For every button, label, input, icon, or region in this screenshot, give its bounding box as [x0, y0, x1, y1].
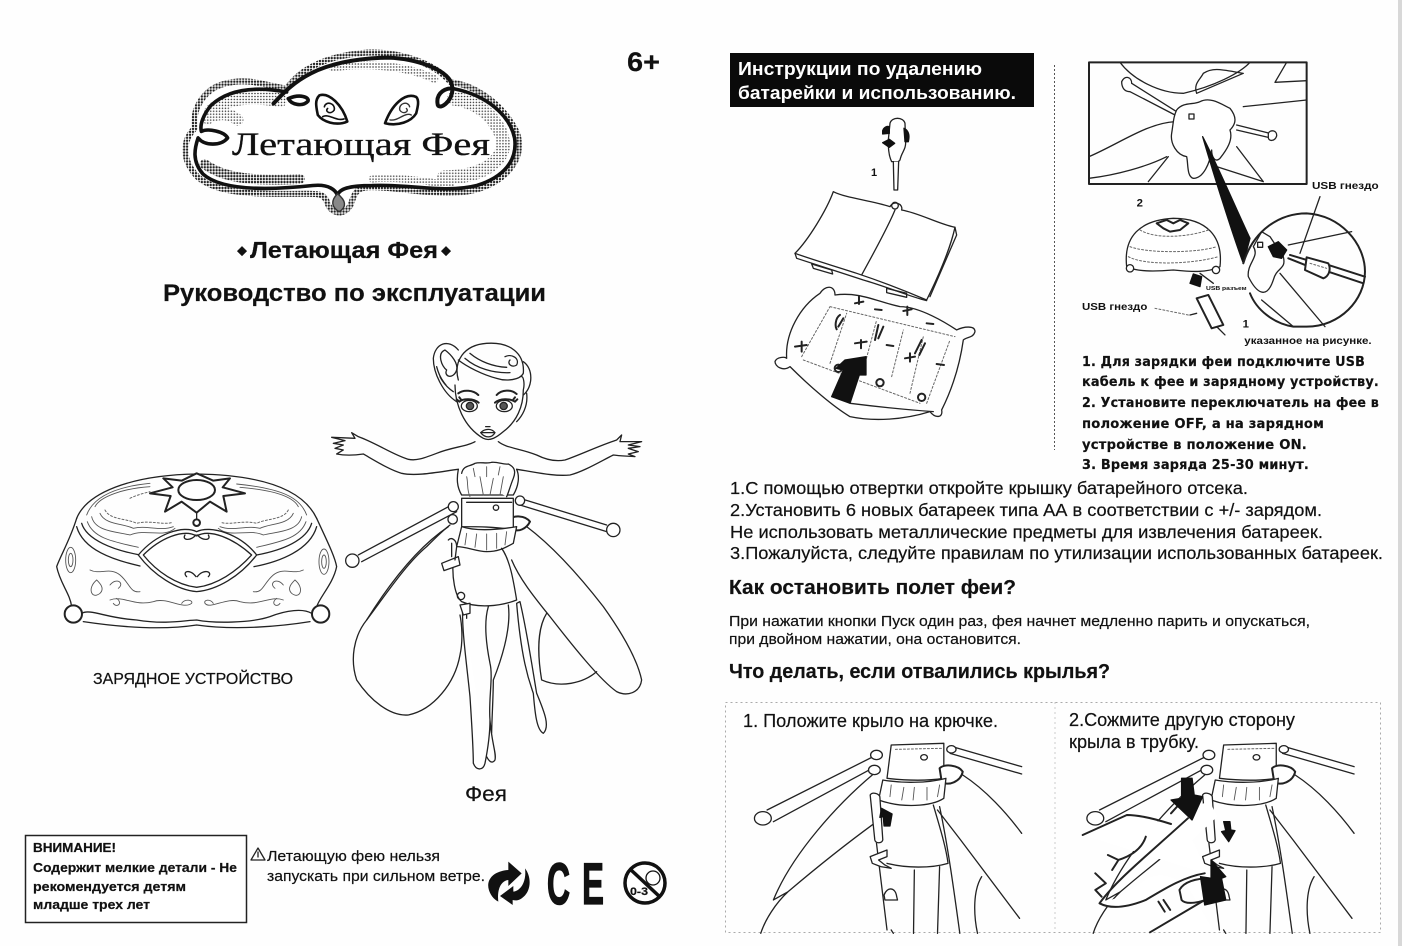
- divider: [1054, 65, 1056, 450]
- panel: wing step 2: [1069, 710, 1354, 933]
- heading: manual: Руководство по эксплуатации: [163, 280, 546, 307]
- heading: wings fell off: Что делать, если отвалились крылья?: [729, 660, 1110, 683]
- fairy sticks: [346, 496, 620, 567]
- icon: not for age 0-3: [625, 863, 665, 903]
- usb labels: 2: [1137, 198, 1143, 210]
- text block: battery steps: 2.Установить 6 новых батареек типа АА в соответствии с +/- зарядом.: [730, 500, 1322, 520]
- wind warning: [251, 848, 485, 885]
- callout wedge: [1203, 137, 1250, 263]
- illustration: USB charging: [1082, 62, 1379, 347]
- panel: wing step 1: [743, 711, 1022, 933]
- logo title: Летающая Фея: [232, 127, 490, 163]
- usb labels: указанное на рисунке.: [1244, 336, 1372, 347]
- icon: CE mark: E: [582, 852, 604, 917]
- illustration: fairy: [332, 343, 642, 769]
- battery cover: [795, 192, 957, 301]
- illustration: battery compartment: [775, 118, 975, 419]
- icon: not for age 0-3: 0-3: [630, 886, 648, 898]
- wind warning: Летающую фею нельзя: [267, 849, 440, 865]
- text block: charging steps: 1. Для зарядки феи подключите USB: [1082, 354, 1365, 370]
- charger small: [1126, 218, 1225, 335]
- step 1 arrow: [880, 808, 892, 826]
- fairy arms: [332, 433, 642, 475]
- detail frame: [1089, 62, 1307, 184]
- text block: stop flight: [729, 614, 1310, 648]
- text block: charging steps: 3. Время заряда 25-30 минут.: [1082, 457, 1309, 473]
- warning box: рекомендуется детям: [33, 880, 186, 894]
- warning box: младше трех лет: [33, 898, 150, 912]
- panel: cover left page: [26, 47, 665, 922]
- heading: product name: ◆: [237, 246, 247, 258]
- warning box: Содержит мелкие детали - Не: [33, 861, 237, 875]
- screwdriver: [883, 118, 909, 190]
- hand: [1083, 790, 1226, 932]
- text block: battery steps: Не использовать металлические предметы для извлечения батареек.: [730, 522, 1323, 542]
- label: fairy: Фея: [465, 783, 507, 806]
- icon: CE mark: C: [547, 852, 570, 917]
- battery tray: [775, 287, 975, 419]
- usb labels: USB гнездо: [1082, 302, 1147, 313]
- step 1 caption: 1. Положите крыло на крючке.: [743, 711, 998, 731]
- text block: charging steps: устройстве в положение ON.: [1082, 437, 1307, 453]
- logo: cloud badge: [185, 53, 519, 212]
- step number: 1: [871, 167, 877, 179]
- fairy dress: [442, 462, 518, 618]
- usb labels: USB разъем: [1206, 286, 1247, 292]
- illustration: charger: [57, 473, 337, 628]
- zoom circle: [1243, 197, 1365, 327]
- usb labels: 1: [1243, 318, 1249, 330]
- text block: charging steps: [1082, 354, 1379, 473]
- step 2 caption: крыла в трубку.: [1069, 732, 1199, 752]
- heading: product name: ◆: [441, 246, 451, 258]
- heading: how to stop: Как остановить полет феи?: [729, 576, 1016, 599]
- text block: charging steps: положение OFF, а на зарядном: [1082, 416, 1324, 432]
- fairy legs: [463, 602, 546, 769]
- icon: recycling: [488, 862, 530, 905]
- fairy head: [433, 343, 531, 439]
- age label: 6+: [627, 47, 660, 77]
- usb labels: [1082, 181, 1379, 347]
- fairy wings: [353, 525, 642, 715]
- step 1 illustration: [754, 743, 1022, 933]
- step 2 caption: [1069, 710, 1295, 752]
- heading: battery instructions: Инструкции по удалению: [738, 59, 982, 79]
- usb labels: USB гнездо: [1312, 181, 1379, 192]
- wind warning: запускать при сильном ветре.: [267, 869, 485, 885]
- text block: charging steps: 2. Установите переключатель на фее в: [1082, 395, 1379, 411]
- heading: battery instructions: батарейки и использованию.: [738, 83, 1016, 103]
- step 2 arrows: [1171, 778, 1235, 905]
- label: charger: ЗАРЯДНОЕ УСТРОЙСТВО: [93, 670, 293, 688]
- text block: stop flight: при двойном нажатии, она остановится.: [729, 632, 1021, 648]
- text block: battery steps: 3.Пожалуйста, следуйте правилам по утилизации использованных батареек.: [730, 543, 1383, 563]
- text block: stop flight: При нажатии кнопки Пуск один раз, фея начнет медленно парить и опускаться,: [729, 614, 1310, 630]
- step 2 caption: 2.Сожмите другую сторону: [1069, 710, 1295, 730]
- scan edge: [1398, 0, 1402, 946]
- heading: battery instructions: [730, 53, 1034, 107]
- warning box: ВНИМАНИЕ!: [33, 841, 116, 855]
- panel: wing repair frame: [726, 702, 1380, 932]
- warning box: [26, 836, 246, 922]
- text block: charging steps: кабель к фее и зарядному устройству.: [1082, 374, 1379, 390]
- text block: battery steps: 1.С помощью отвертки откройте крышку батарейного отсека.: [730, 478, 1248, 498]
- text block: battery steps: [730, 478, 1383, 563]
- heading: product name: Летающая Фея: [250, 237, 438, 263]
- panel: right page: [726, 53, 1383, 933]
- icon: warning triangle: [251, 848, 265, 860]
- step 2 illustration: [1083, 743, 1354, 933]
